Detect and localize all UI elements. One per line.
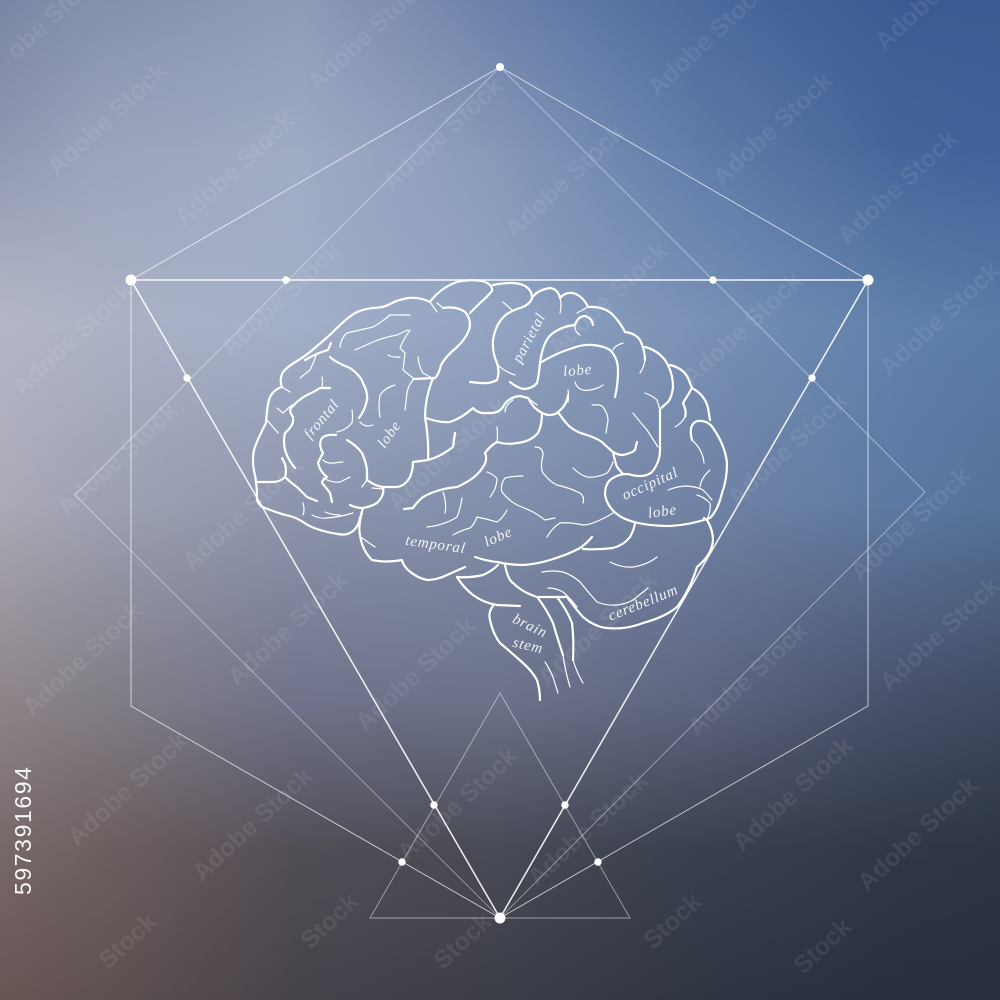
label: cerebellum: cerebellum — [606, 582, 681, 625]
node dots — [126, 63, 874, 924]
label: parietal lobe — [509, 311, 593, 380]
geometric frame: hexagons and triangles — [75, 67, 925, 918]
label: brain stem: stem — [511, 635, 545, 657]
lobe labels — [301, 311, 681, 657]
label: parietal lobe: parietal — [509, 311, 549, 367]
outer hexagon — [131, 67, 868, 918]
stock watermarks: Adobe Stock — [62, 727, 193, 851]
stock watermarks: Adobe Stock — [177, 452, 308, 576]
label: temporal lobe: temporal — [404, 533, 467, 557]
stock watermarks: Adobe Stock — [722, 387, 853, 511]
stock watermarks: Stock — [93, 908, 162, 975]
major contours and folds — [253, 280, 727, 700]
label: temporal lobe: lobe — [482, 524, 515, 551]
stock watermarks: Adobe Stock — [832, 125, 963, 249]
label: occipital lobe — [620, 465, 681, 522]
stock watermarks: Adobe Stock — [17, 597, 148, 721]
label: frontal lobe: lobe — [375, 418, 405, 451]
stock watermarks: Adobe Stock — [677, 267, 808, 391]
label: temporal lobe — [404, 524, 515, 557]
small lower triangle — [370, 693, 630, 918]
label: brain stem — [510, 611, 550, 657]
label: occipital lobe: lobe — [647, 502, 678, 522]
stock watermarks: Adobe Stock — [42, 57, 173, 181]
stock watermarks: Stock — [788, 913, 857, 980]
stock watermarks: Adobe Stock — [522, 767, 653, 891]
stock watermarks: Stock — [295, 888, 364, 955]
stock watermarks: Adobe Stock — [727, 732, 858, 856]
label: brain stem: brain — [510, 611, 550, 642]
stock watermarks: Adobe Stock — [499, 119, 630, 243]
stock watermarks: Adobe Stock — [377, 72, 508, 196]
stock watermarks: Adobe Stock — [222, 567, 353, 691]
stock watermarks: Adobe Stock — [682, 617, 813, 741]
stock watermarks: Stock — [638, 888, 707, 955]
stock watermarks: Adobe Stock — [532, 567, 663, 691]
label: frontal lobe: frontal — [301, 397, 343, 442]
label: occipital lobe: occipital — [620, 465, 681, 504]
stock watermarks: Adobe Stock — [382, 392, 513, 516]
stock watermarks: Adobe Stock — [707, 67, 838, 191]
stock watermarks: Adobe Stock — [542, 237, 673, 361]
stock watermarks: Adobe Stock — [392, 742, 523, 866]
stock watermarks: Adobe Stock — [52, 397, 183, 521]
stock watermarks: Adobe Stock — [852, 772, 983, 896]
fine sulci and tapered strokes — [267, 298, 712, 693]
label: frontal lobe — [301, 397, 405, 451]
brain outline illustration — [253, 280, 727, 700]
inner diamond lines — [75, 67, 925, 918]
stock watermarks: Adobe Stock — [215, 237, 346, 361]
stock watermarks: Adobe Stock — [169, 107, 300, 231]
stock watermarks: Adobe Stock — [187, 762, 318, 886]
stock watermarks: Stock — [428, 908, 497, 975]
stock watermarks: Adobe Stock — [7, 277, 138, 401]
main inverted triangle — [131, 280, 868, 918]
stock watermarks: Adobe Stock — [350, 612, 481, 736]
stock watermarks: Adobe Stock — [845, 462, 976, 586]
label: parietal lobe: lobe — [562, 362, 593, 380]
stock image number: 597391694 — [10, 765, 36, 895]
